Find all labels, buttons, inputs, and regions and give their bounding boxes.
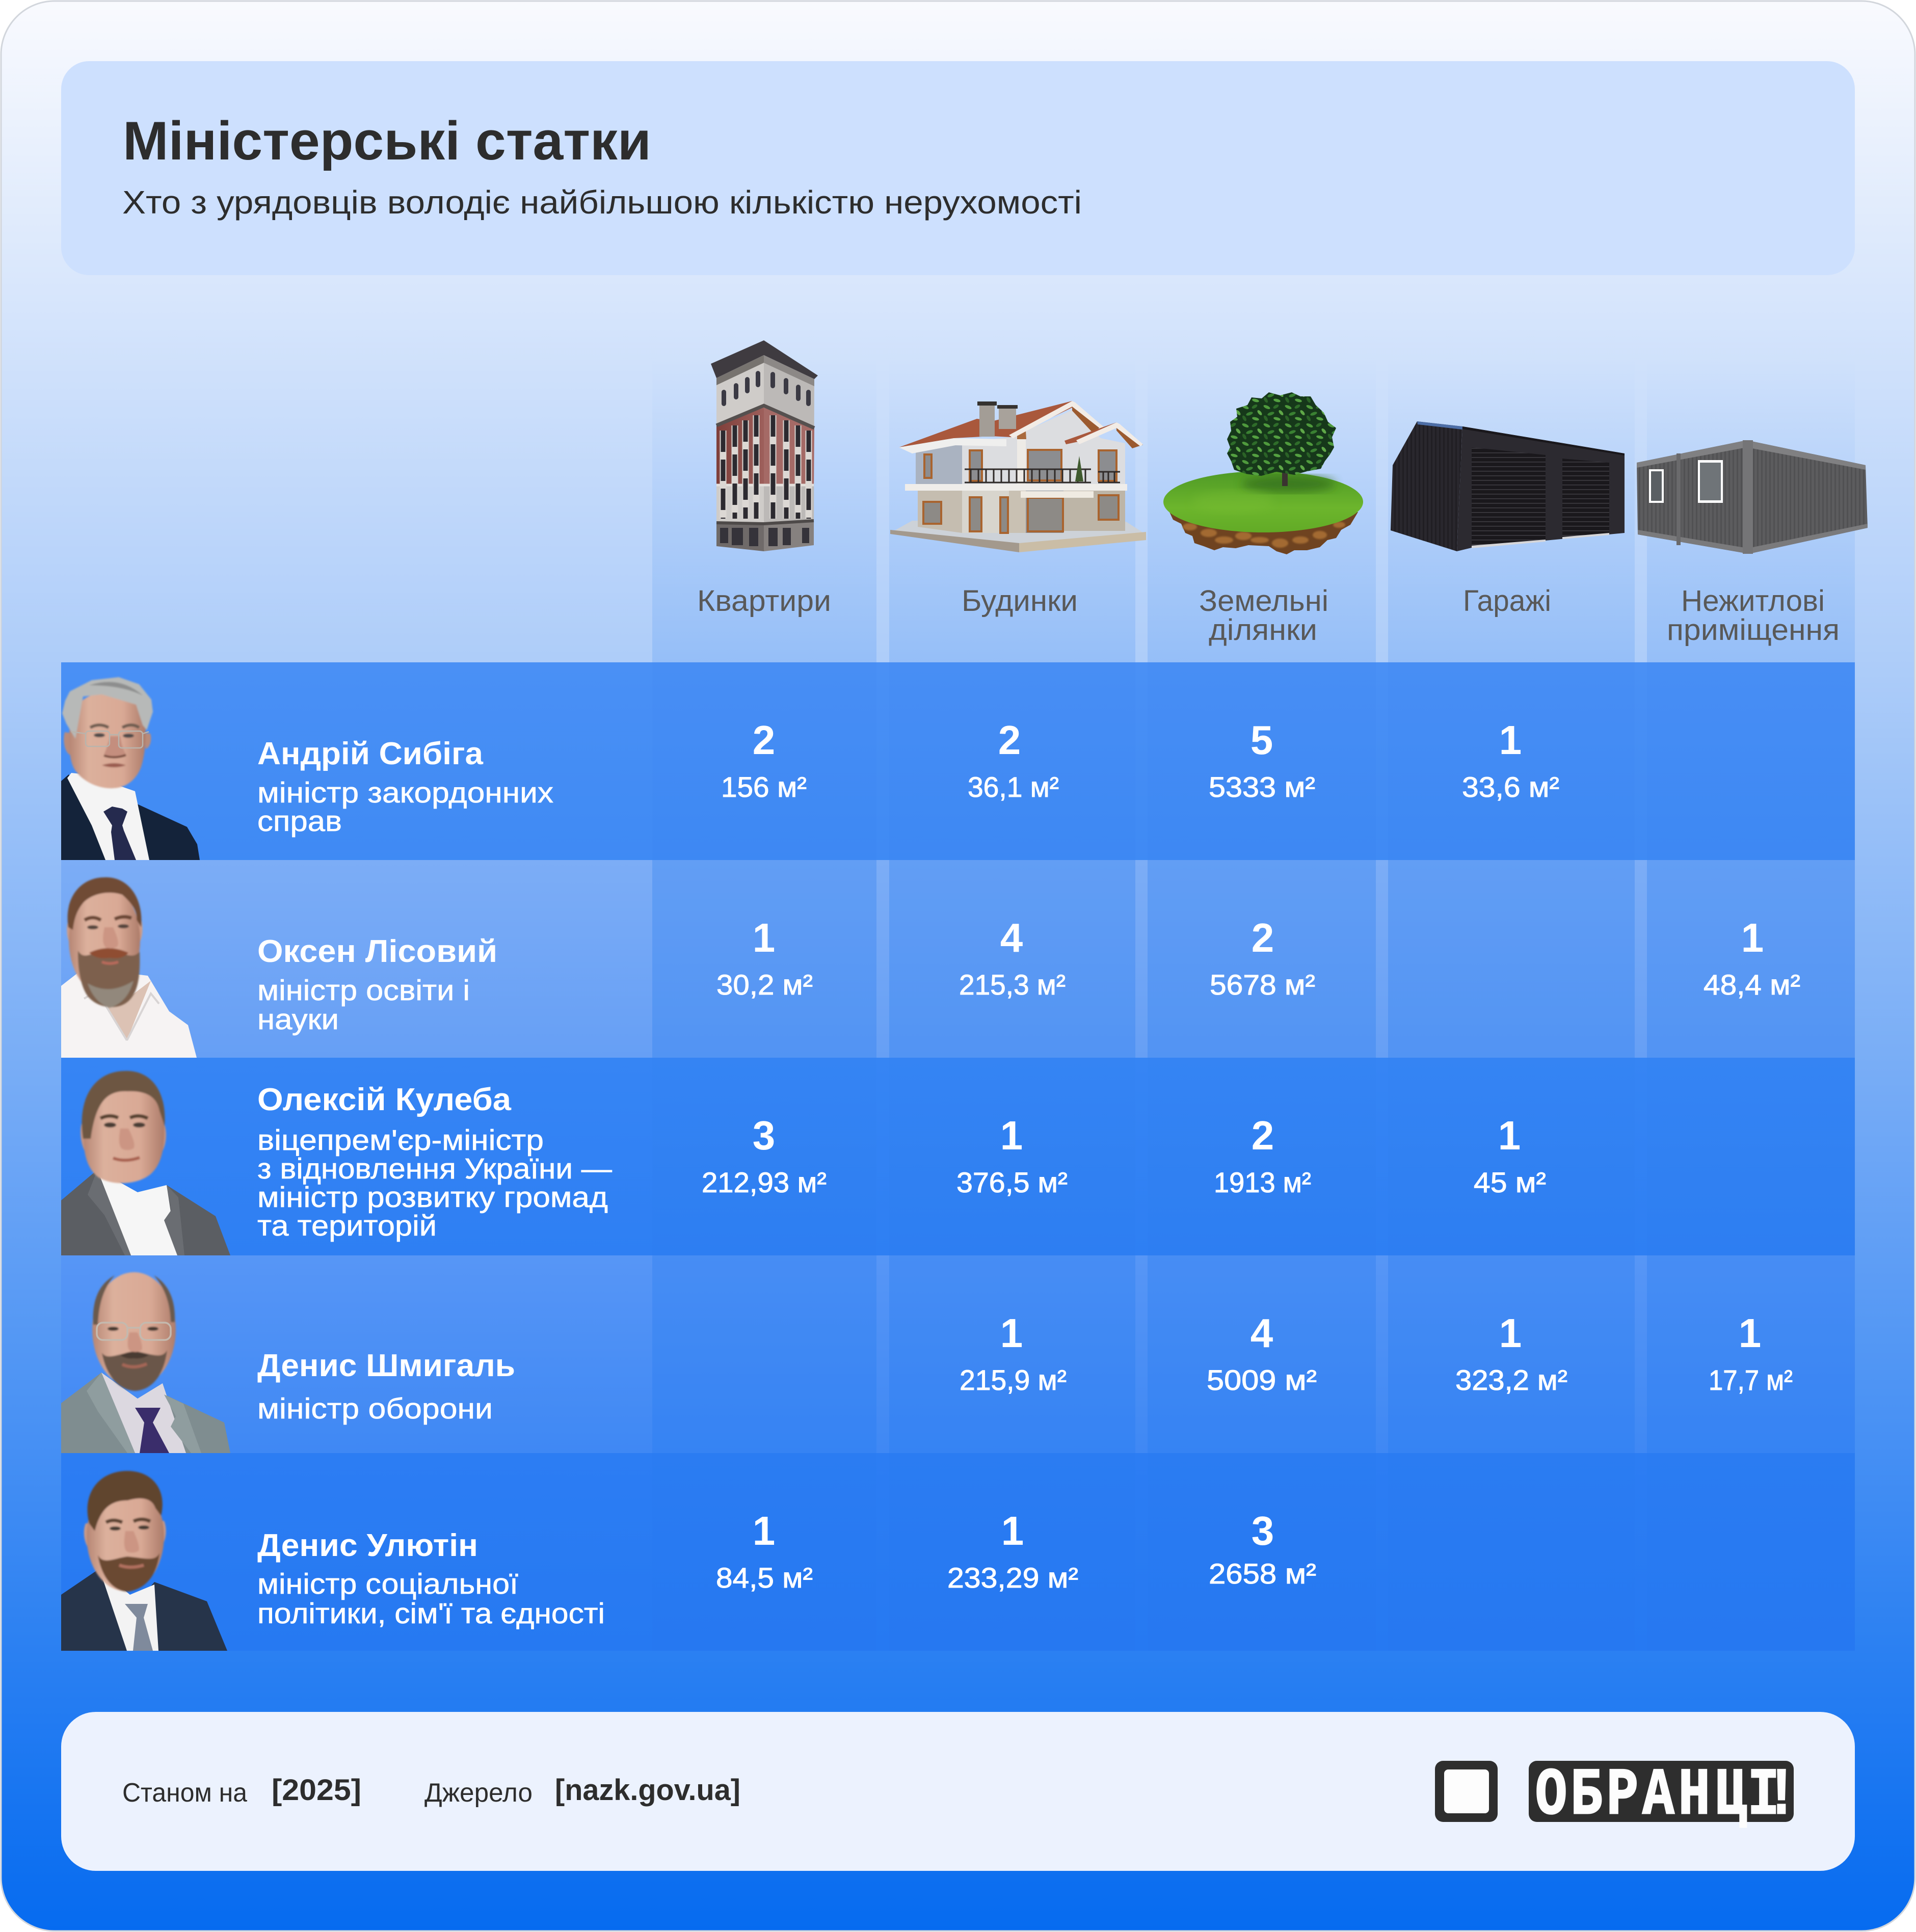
value cell: houses bbox=[956, 1113, 1068, 1198]
portrait: Лісовий bbox=[61, 877, 197, 1058]
name: Денис Улютін bbox=[257, 1528, 478, 1563]
position: міністр закордонних bbox=[257, 776, 553, 809]
name: Оксен Лісовий bbox=[257, 934, 497, 969]
position: з відновлення України — bbox=[257, 1152, 612, 1185]
value cell: apartments: 3 bbox=[753, 1113, 775, 1158]
column label: land plots: Земельні bbox=[1199, 584, 1328, 618]
value cell: apartments: 2 bbox=[753, 717, 775, 763]
value cell: garages: 45 м² bbox=[1474, 1166, 1546, 1198]
icon: container unit bbox=[1637, 440, 1868, 554]
position bbox=[257, 1124, 612, 1242]
icon: land plot with tree bbox=[1163, 392, 1363, 554]
column label: non-residential premises bbox=[1667, 584, 1840, 647]
value cell: non-residential: 17,7 м² bbox=[1709, 1364, 1793, 1396]
value cell: non-residential: 1 bbox=[1741, 915, 1764, 960]
footer: source: [nazk.gov.ua] bbox=[555, 1774, 740, 1807]
value cell: land: 2 bbox=[1252, 1113, 1274, 1158]
value cell: apartments: 156 м² bbox=[721, 771, 807, 803]
value cell: garages bbox=[1455, 1310, 1567, 1396]
value cell: land: 1913 м² bbox=[1214, 1166, 1311, 1198]
value cell: apartments: 1 bbox=[753, 1508, 775, 1553]
column label: non-residential premises: приміщення bbox=[1667, 613, 1840, 647]
column label: land plots bbox=[1199, 584, 1328, 647]
column label: apartments: Квартири bbox=[697, 584, 831, 618]
portrait: Шмигаль bbox=[61, 1272, 230, 1453]
icon: house bbox=[890, 401, 1146, 552]
value cell: apartments: 84,5 м² bbox=[716, 1562, 813, 1594]
value cell: garages bbox=[1474, 1113, 1546, 1198]
value cell: houses: 215,9 м² bbox=[960, 1364, 1067, 1396]
value cell: non-residential bbox=[1709, 1310, 1793, 1396]
value cell: non-residential bbox=[1704, 915, 1800, 1001]
position bbox=[257, 974, 470, 1036]
value cell: houses bbox=[959, 915, 1066, 1001]
value cell: houses: 4 bbox=[1000, 915, 1023, 960]
row: Оксен Лісовий bbox=[61, 877, 1800, 1058]
footer: source: Джерело bbox=[424, 1778, 533, 1808]
column label: garages: Гаражі bbox=[1463, 584, 1551, 618]
value cell: houses: 233,29 м² bbox=[947, 1562, 1078, 1594]
column label: land plots: ділянки bbox=[1209, 613, 1317, 647]
value cell: garages: 323,2 м² bbox=[1455, 1364, 1567, 1396]
position: справ bbox=[257, 805, 342, 838]
value cell: land bbox=[1210, 915, 1315, 1001]
value cell: houses bbox=[960, 1310, 1067, 1396]
footer: as of date: [2025] bbox=[272, 1774, 361, 1807]
icon: apartment tower bbox=[711, 340, 818, 551]
column header backgrounds bbox=[652, 357, 1855, 662]
value cell: land bbox=[1209, 1508, 1316, 1590]
row: Олексій Кулеба bbox=[61, 1071, 1546, 1255]
value cell: garages: 1 bbox=[1498, 1113, 1521, 1158]
value cell: houses bbox=[947, 1508, 1078, 1594]
value cell: non-residential: 48,4 м² bbox=[1704, 969, 1800, 1001]
footer: as of date: Станом на bbox=[122, 1778, 247, 1808]
value cell: apartments bbox=[702, 1113, 827, 1198]
portrait: Улютін bbox=[61, 1471, 227, 1651]
footer panel bbox=[61, 1712, 1855, 1871]
value cell: houses bbox=[968, 717, 1059, 803]
position: міністр соціальної bbox=[257, 1568, 518, 1600]
value cell: houses: 215,3 м² bbox=[959, 969, 1066, 1001]
value cell: houses: 1 bbox=[1000, 1113, 1023, 1158]
value cell: land bbox=[1214, 1113, 1311, 1198]
row: Денис Улютін bbox=[61, 1471, 1316, 1651]
position: та територій bbox=[257, 1210, 437, 1242]
portrait: Сибіга bbox=[61, 677, 200, 860]
value cell: garages: 1 bbox=[1499, 717, 1522, 763]
value cell: land: 2658 м² bbox=[1209, 1558, 1316, 1590]
name: Олексій Кулеба bbox=[257, 1082, 512, 1117]
value cell: apartments: 1 bbox=[753, 915, 775, 960]
portrait: Кулеба bbox=[61, 1071, 230, 1255]
subtitle: Хто з урядовців володіє найбільшою кількістю нерухомості bbox=[122, 184, 1082, 221]
value cell: houses: 1 bbox=[1001, 1508, 1024, 1553]
footer: as of date bbox=[122, 1774, 361, 1808]
value cell: land: 5678 м² bbox=[1210, 969, 1315, 1001]
value cell: non-residential: 1 bbox=[1739, 1310, 1761, 1356]
position: міністр розвитку громад bbox=[257, 1181, 608, 1214]
value cell: land: 2 bbox=[1252, 915, 1274, 960]
name: Андрій Сибіга bbox=[257, 736, 484, 771]
icon: garage bbox=[1391, 421, 1625, 551]
position: науки bbox=[257, 1003, 339, 1036]
position: політики, сім'ї та єдності bbox=[257, 1597, 605, 1630]
position: міністр оборони bbox=[257, 1392, 493, 1425]
value cell: garages: 33,6 м² bbox=[1462, 771, 1559, 803]
value cell: land: 4 bbox=[1250, 1310, 1273, 1356]
value cell: land: 5 bbox=[1250, 717, 1273, 763]
value cell: houses: 376,5 м² bbox=[956, 1166, 1068, 1198]
row: Андрій Сибіга bbox=[61, 677, 1559, 860]
column label: houses: Будинки bbox=[962, 584, 1078, 618]
value cell: houses: 1 bbox=[1000, 1310, 1023, 1356]
value cell: land bbox=[1209, 717, 1315, 803]
value cell: apartments bbox=[716, 1508, 813, 1594]
value cell: houses: 36,1 м² bbox=[968, 771, 1059, 803]
value cell: garages: 1 bbox=[1499, 1310, 1522, 1356]
column label: non-residential premises: Нежитлові bbox=[1681, 584, 1825, 618]
value cell: apartments bbox=[716, 915, 813, 1001]
value cell: apartments bbox=[721, 717, 807, 803]
row: Денис Шмигаль bbox=[61, 1272, 1793, 1453]
position bbox=[257, 776, 553, 838]
footer: source bbox=[424, 1774, 740, 1808]
name: Денис Шмигаль bbox=[257, 1348, 515, 1383]
value cell: garages bbox=[1462, 717, 1559, 803]
title: Міністерські статки bbox=[123, 110, 651, 171]
value cell: apartments: 30,2 м² bbox=[716, 969, 813, 1001]
value cell: land: 5333 м² bbox=[1209, 771, 1315, 803]
position bbox=[257, 1568, 605, 1630]
value cell: apartments: 212,93 м² bbox=[702, 1166, 827, 1198]
value cell: land: 3 bbox=[1252, 1508, 1274, 1553]
value cell: houses: 2 bbox=[998, 717, 1021, 763]
value cell: land bbox=[1207, 1310, 1317, 1396]
header panel bbox=[61, 61, 1855, 275]
logo: ОБРАНЦІ! bbox=[1535, 1759, 1797, 1834]
value cell: land: 5009 м² bbox=[1207, 1364, 1317, 1396]
table row bands bbox=[61, 662, 1855, 1651]
position: міністр освіти і bbox=[257, 974, 470, 1007]
position: віцепрем'єр-міністр bbox=[257, 1124, 544, 1157]
